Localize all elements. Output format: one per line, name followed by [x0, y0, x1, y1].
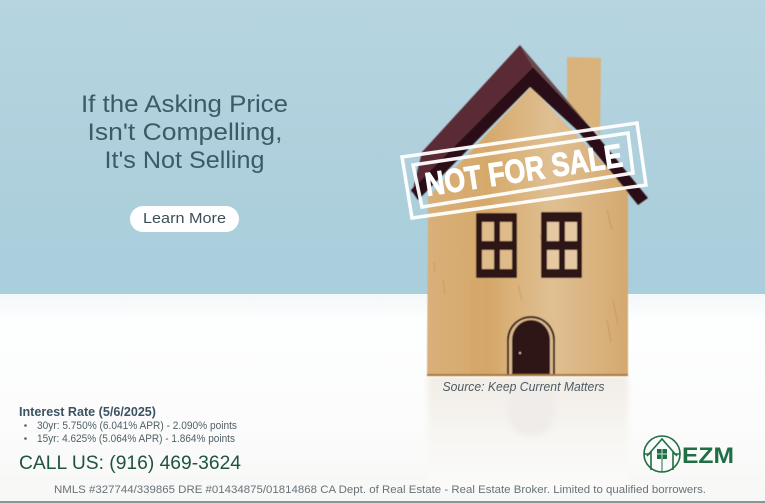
door — [507, 316, 555, 375]
chimney — [567, 57, 601, 135]
interest rate heading: Interest Rate (5/6/2025) — [19, 405, 156, 419]
stamp text: NOT FOR SALE — [423, 137, 625, 203]
logo wordmark: EZM — [682, 443, 734, 468]
background: white table — [0, 294, 765, 503]
roof dark trim — [411, 67, 648, 205]
interest rate block — [19, 405, 237, 445]
stamp outer frame — [402, 123, 646, 218]
house base shadow — [427, 374, 628, 376]
rate list: 30yr: 5.750% (6.041% APR) - 2.090% points — [37, 420, 237, 432]
rate list — [24, 420, 237, 445]
stamp inner frame — [413, 133, 633, 207]
learn more button: Learn More — [143, 210, 226, 227]
right window — [541, 212, 582, 278]
headline: If the Asking Price — [81, 91, 288, 118]
left window — [476, 213, 517, 278]
house body — [427, 87, 628, 375]
logo icon — [644, 436, 680, 472]
roof right edge — [520, 45, 590, 127]
bottom edge line — [0, 501, 765, 503]
rate list: 15yr: 4.625% (5.064% APR) - 1.864% points — [37, 433, 235, 445]
warm wood band — [470, 280, 500, 375]
wood grain — [434, 210, 618, 342]
licensing footer: NMLS #327744/339865 DRE #01434875/01814868 CA Dept. of Real Estate - Real Estate Broker. Limited to qualified borrowers. — [54, 484, 706, 496]
learn more button — [130, 206, 239, 232]
headline: Isn't Compelling, — [88, 119, 282, 146]
EZM logo — [644, 436, 734, 472]
house reflection — [428, 376, 628, 491]
headline: It's Not Selling — [104, 147, 264, 174]
source credit: Source: Keep Current Matters — [442, 380, 604, 394]
wooden house photo — [411, 45, 648, 376]
background: blue wall — [0, 0, 765, 294]
headline — [81, 91, 288, 174]
stamp: not for sale — [402, 123, 646, 218]
roof top face — [411, 45, 533, 193]
phone number: CALL US: (916) 469-3624 — [19, 452, 241, 474]
